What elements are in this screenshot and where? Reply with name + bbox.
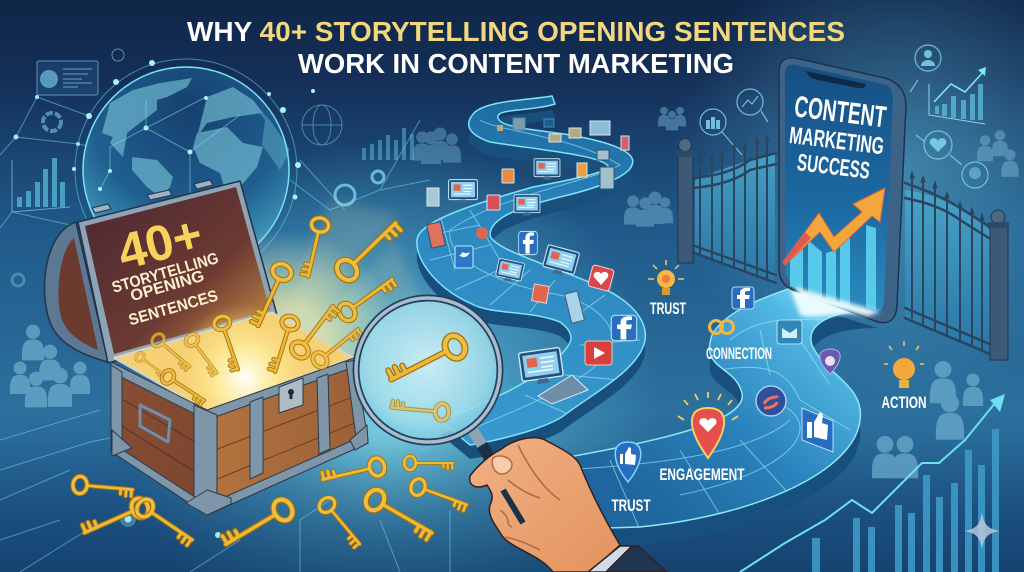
dashboard card with pie [37, 49, 124, 95]
key [249, 261, 294, 330]
key [310, 323, 363, 370]
people silhouettes lower right [872, 361, 983, 478]
key [316, 494, 366, 549]
icon: engagement heart pin [678, 392, 738, 458]
key [267, 314, 300, 374]
icon: circular badge [756, 386, 786, 416]
key [183, 332, 222, 377]
icon: video play bubble [585, 341, 612, 365]
growth chart lower right [740, 394, 1005, 572]
label connection: CONNECTION [706, 345, 772, 363]
continents [102, 78, 290, 197]
right iron gate [905, 172, 1009, 360]
icon: mail tile [777, 320, 802, 344]
icon: thumbs up tile [802, 408, 833, 452]
circle icon glyphs [706, 50, 981, 179]
smartphone [779, 58, 906, 323]
lid label text: 40+ [112, 206, 208, 280]
line and bar chart top right [929, 67, 986, 124]
icon: donut chart [43, 113, 61, 131]
key [134, 351, 167, 378]
phone headline [785, 90, 889, 186]
key [300, 216, 330, 279]
lens rim [356, 298, 500, 442]
key [80, 496, 151, 542]
key [220, 496, 296, 554]
key [321, 456, 386, 488]
label trust lower: TRUST [612, 497, 650, 515]
audience silhouettes left [10, 325, 90, 407]
hand holding magnifier [470, 438, 667, 572]
lens key large [386, 332, 469, 390]
metal straps and corners [111, 358, 368, 515]
lid label text: SENTENCES [127, 288, 220, 329]
globe with wireframe [72, 59, 315, 281]
key [409, 477, 470, 513]
key [72, 476, 133, 498]
back people silhouettes [624, 107, 1019, 227]
phone bars [790, 225, 876, 310]
magnifying glass [356, 298, 530, 525]
icon: thumbs up pin [615, 442, 641, 482]
icon: lightbulb trust [648, 260, 684, 295]
left iron gate [677, 136, 776, 283]
chest body right face [207, 360, 368, 515]
winding back road [417, 96, 645, 459]
key [212, 314, 246, 372]
title line two: WORK IN CONTENT MARKETING [298, 48, 734, 79]
gate post right [988, 210, 1009, 360]
key [159, 368, 208, 406]
icon: purple pin [820, 349, 840, 374]
icon: heart bubble [588, 265, 614, 291]
lid label text: OPENING [129, 268, 206, 305]
lens [357, 299, 499, 441]
key [404, 456, 453, 470]
gate post left [677, 138, 694, 263]
golden keys on the ground [72, 456, 470, 554]
icon: linked rings [710, 320, 734, 334]
network circle icons top right [700, 45, 988, 188]
phone headline: MARKETING [788, 122, 885, 160]
icon: lightbulb action [884, 341, 924, 388]
chest body left face [112, 365, 207, 515]
treasure chest [44, 180, 368, 515]
title line one: WHY 40+ STORYTELLING OPENING SENTENCES [187, 16, 845, 47]
front road to phone [573, 288, 878, 529]
light rays behind chest [170, 200, 420, 460]
lens key faded [391, 399, 449, 421]
golden keys bursting from chest [134, 215, 403, 406]
label action: ACTION [882, 394, 926, 412]
lid label text: STORYTELLING [110, 250, 221, 297]
lid label text [110, 206, 221, 329]
chest lid back [44, 180, 277, 363]
bar chart top left [12, 158, 70, 212]
key [134, 496, 197, 547]
key [149, 331, 194, 372]
phone headline: CONTENT [792, 90, 888, 134]
social icons on middle road [495, 231, 637, 404]
key [362, 486, 437, 542]
phone headline: SUCCESS [796, 149, 871, 185]
shirt cuff [588, 546, 632, 572]
chest opening [115, 313, 353, 410]
label engagement: ENGAGEMENT [660, 466, 744, 484]
title [187, 16, 845, 79]
handle [470, 426, 530, 525]
icon: sparkle star [964, 512, 1000, 549]
faint people behind road [413, 128, 461, 164]
bar chart top centre [362, 128, 414, 160]
key [288, 301, 340, 361]
icon: small globe right of main globe [302, 105, 342, 145]
suit sleeve [606, 546, 667, 572]
growth arrow [783, 188, 885, 265]
icon: twitter tile [455, 246, 473, 268]
label trust: TRUST [650, 300, 686, 318]
journey labels and icons [612, 260, 926, 515]
key [333, 215, 403, 284]
palm and fingers [470, 438, 620, 572]
lock plate [279, 378, 303, 413]
key [336, 272, 398, 324]
back floating screens [427, 118, 629, 248]
